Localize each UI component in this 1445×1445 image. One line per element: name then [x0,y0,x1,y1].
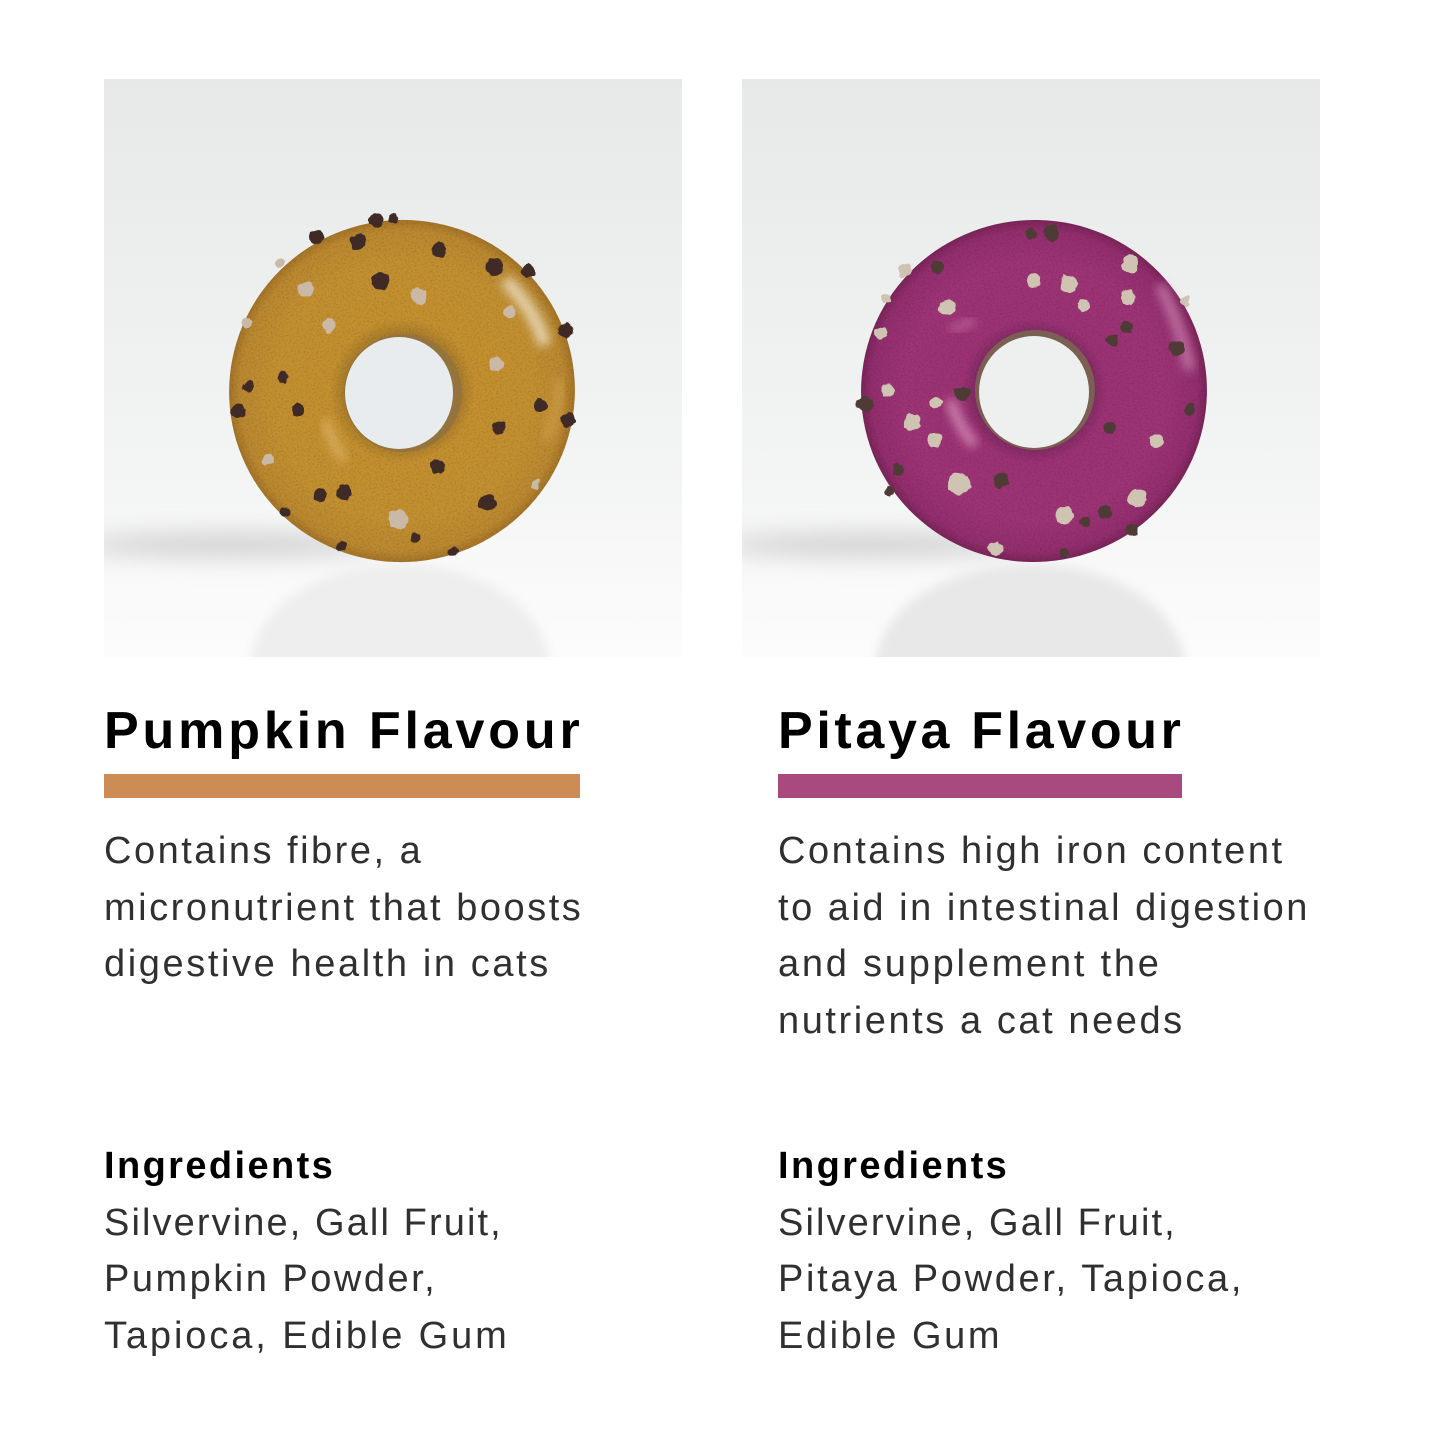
text block: pitaya description: to aid in intestinal digestion [778,886,1310,928]
text block: pumpkin ingredients: Pumpkin Powder, [104,1258,437,1300]
text block: pumpkin description: Contains fibre, a [104,830,423,872]
text block: pumpkin ingredients [104,1145,510,1356]
text block: pitaya ingredients: Pitaya Powder, Tapioca, [778,1258,1244,1300]
text block: pumpkin description [104,830,583,985]
heading: Pumpkin Flavour: Pumpkin Flavour [104,702,584,760]
cast shadow [720,534,1020,556]
panel: pumpkin donut photo [104,79,682,657]
colour bar: pitaya [778,774,1182,798]
text block: pitaya description: nutrients a cat needs [778,1000,1185,1042]
reflection [875,564,1185,772]
text block: pumpkin ingredients: Silvervine, Gall Fruit, [104,1202,503,1244]
text block: pitaya ingredients: Edible Gum [778,1314,1002,1356]
text block: pumpkin description: micronutrient that boosts [104,886,583,928]
text block: pumpkin ingredients: Tapioca, Edible Gum [104,1314,510,1356]
colour bar: pumpkin [104,774,580,798]
text block: pumpkin description: digestive health in cats [104,943,551,985]
text block: pitaya ingredients [778,1145,1244,1356]
heading: Pitaya Flavour: Pitaya Flavour [778,702,1185,760]
text block: pumpkin ingredients: Ingredients [104,1145,335,1187]
text block: pitaya description [778,830,1310,1042]
cast shadow [80,534,380,556]
icon: pitaya donut [834,193,1234,589]
text block: pitaya ingredients: Silvervine, Gall Fruit, [778,1202,1177,1244]
icon: pumpkin donut [193,183,611,599]
reflection [250,564,550,772]
text block: pitaya description: and supplement the [778,943,1162,985]
text block: pitaya ingredients: Ingredients [778,1145,1009,1187]
panel: pitaya donut photo [742,79,1320,657]
text block: pitaya description: Contains high iron content [778,830,1285,872]
